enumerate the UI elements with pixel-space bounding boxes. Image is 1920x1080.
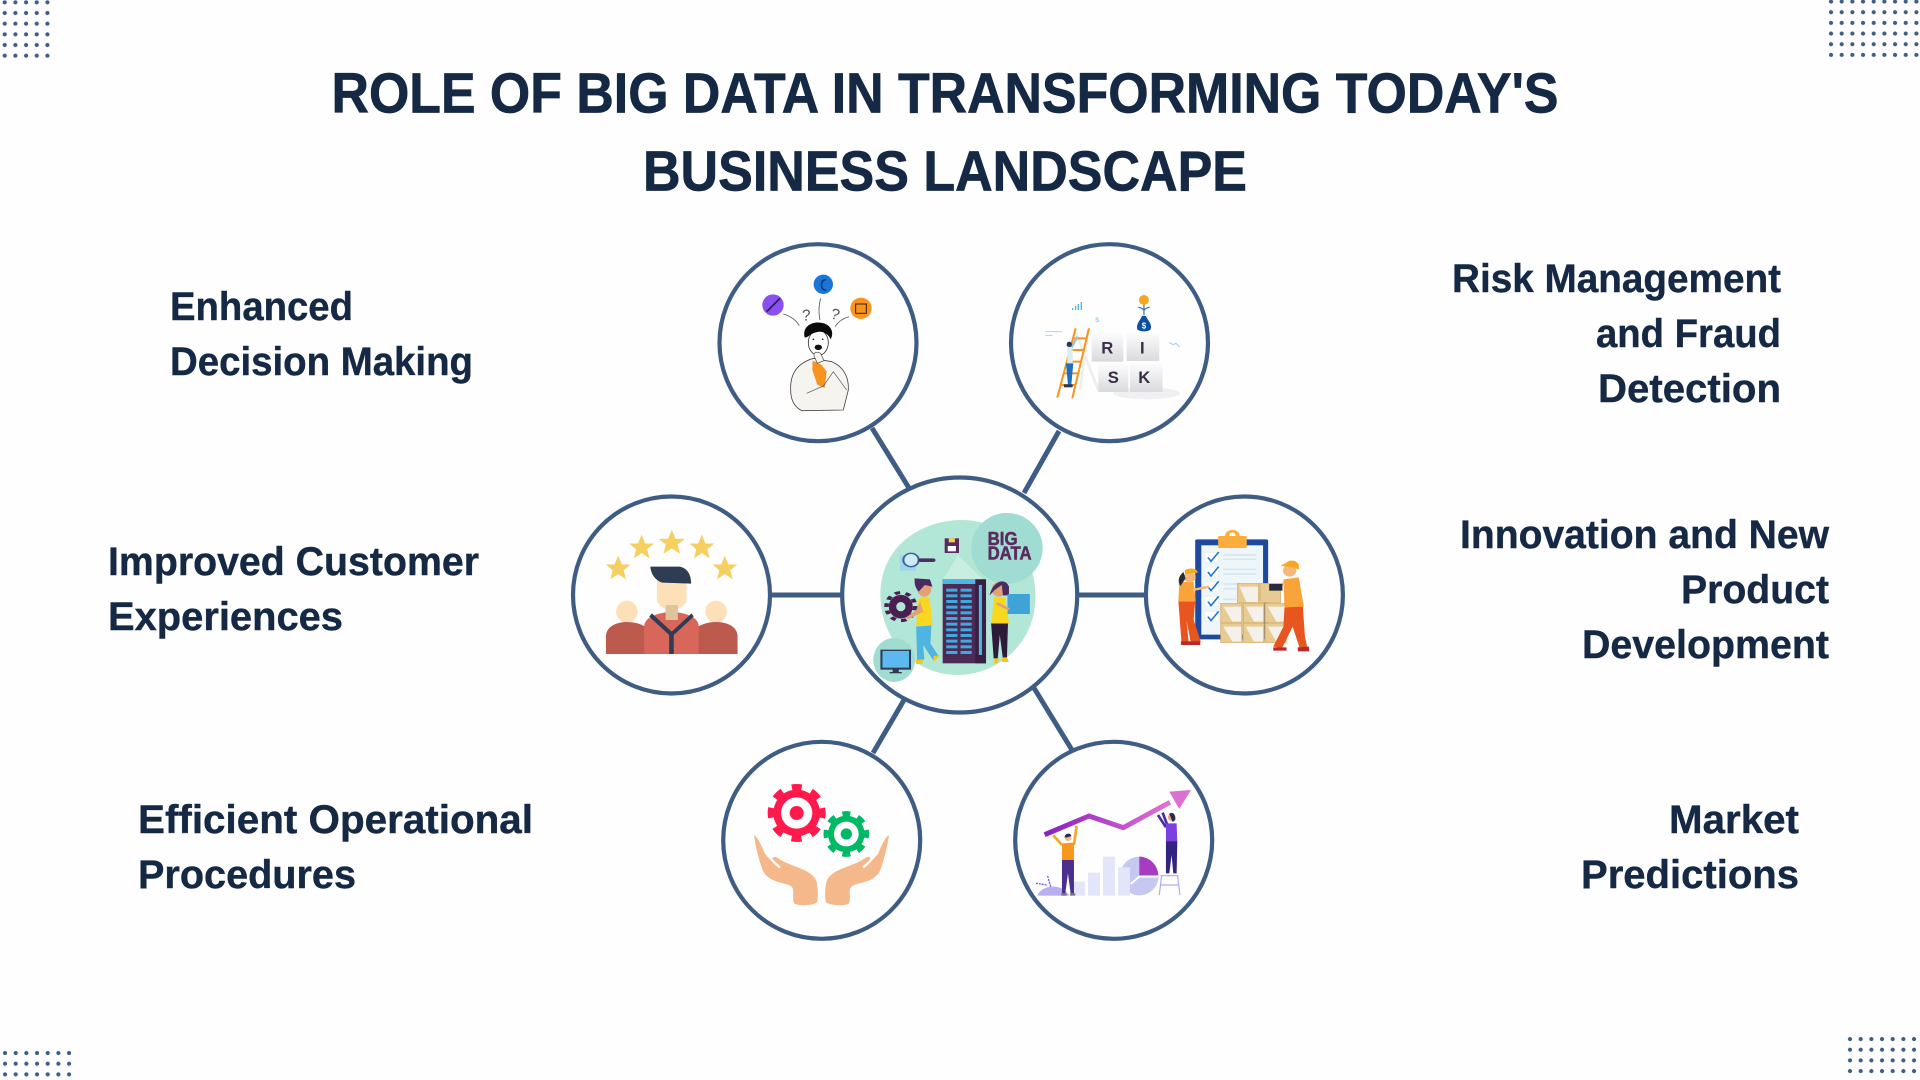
circle: big data centre [842, 478, 1077, 712]
icon: risk blocks with ladder [1045, 295, 1180, 399]
icon: risk blocks with ladder: S [1108, 368, 1119, 387]
dot pattern top right [1826, 0, 1920, 60]
label: improved customer experiences: Improved Customer [108, 540, 479, 584]
title: BUSINESS LANDSCAPE [643, 140, 1247, 202]
label: market predictions: Market [1669, 798, 1799, 842]
icon: gears in hands [754, 787, 889, 905]
label: innovation and new product development [1460, 513, 1829, 667]
label: risk management and fraud detection [1452, 257, 1781, 411]
text: big data badge [988, 529, 1032, 564]
text: big data badge: BIG [988, 529, 1018, 549]
dot pattern bottom left [0, 1048, 75, 1080]
label: risk management and fraud detection: and Fraud [1596, 312, 1781, 356]
icon: thinking man: ? [829, 306, 841, 324]
label: innovation and new product development: Development [1582, 623, 1829, 667]
circle: customer experiences [573, 496, 770, 694]
icon: risk blocks with ladder: $ [1142, 322, 1147, 331]
icon: checklist and boxes [1178, 531, 1309, 651]
circle: market predictions [1015, 742, 1212, 939]
circle: innovation and product development [1146, 496, 1343, 694]
text: big data badge: DATA [988, 544, 1032, 564]
label: improved customer experiences: Experiences [108, 595, 343, 639]
icon: risk blocks with ladder: R [1101, 339, 1113, 358]
icon: growth chart with people [1036, 790, 1191, 896]
icon: thinking man: ? [802, 308, 811, 325]
label: market predictions: Predictions [1581, 853, 1799, 897]
icon: thinking man [762, 275, 872, 411]
icon: risk blocks with ladder: I [1140, 339, 1145, 358]
label: risk management and fraud detection: Risk Management [1452, 257, 1781, 301]
circle: risk management [1011, 244, 1208, 441]
dot pattern bottom right [1845, 1034, 1920, 1077]
connector lines [770, 428, 1147, 753]
label: efficient operational procedures: Efficient Operational [138, 798, 533, 842]
label: innovation and new product development: Product [1681, 568, 1829, 612]
label: risk management and fraud detection: Detection [1598, 367, 1781, 411]
icon: risk blocks with ladder: $ [1095, 317, 1099, 324]
label: efficient operational procedures: Procedures [138, 853, 356, 897]
title: ROLE OF BIG DATA IN TRANSFORMING TODAY'S [332, 62, 1558, 124]
label: market predictions [1581, 798, 1799, 897]
icon: five stars and customers [606, 530, 738, 654]
circle: efficient operational procedures [723, 742, 920, 939]
title [332, 62, 1558, 202]
label: innovation and new product development: Innovation and New [1460, 513, 1829, 557]
label: improved customer experiences [108, 540, 479, 639]
label: enhanced decision making: Enhanced [170, 285, 353, 329]
dot pattern top left [0, 0, 53, 62]
label: efficient operational procedures [138, 798, 533, 897]
icon: risk blocks with ladder: K [1138, 368, 1150, 387]
label: enhanced decision making: Decision Making [170, 340, 473, 384]
circle: decision making [720, 244, 916, 441]
label: enhanced decision making [170, 285, 473, 384]
icon: big data server and people [873, 513, 1043, 682]
